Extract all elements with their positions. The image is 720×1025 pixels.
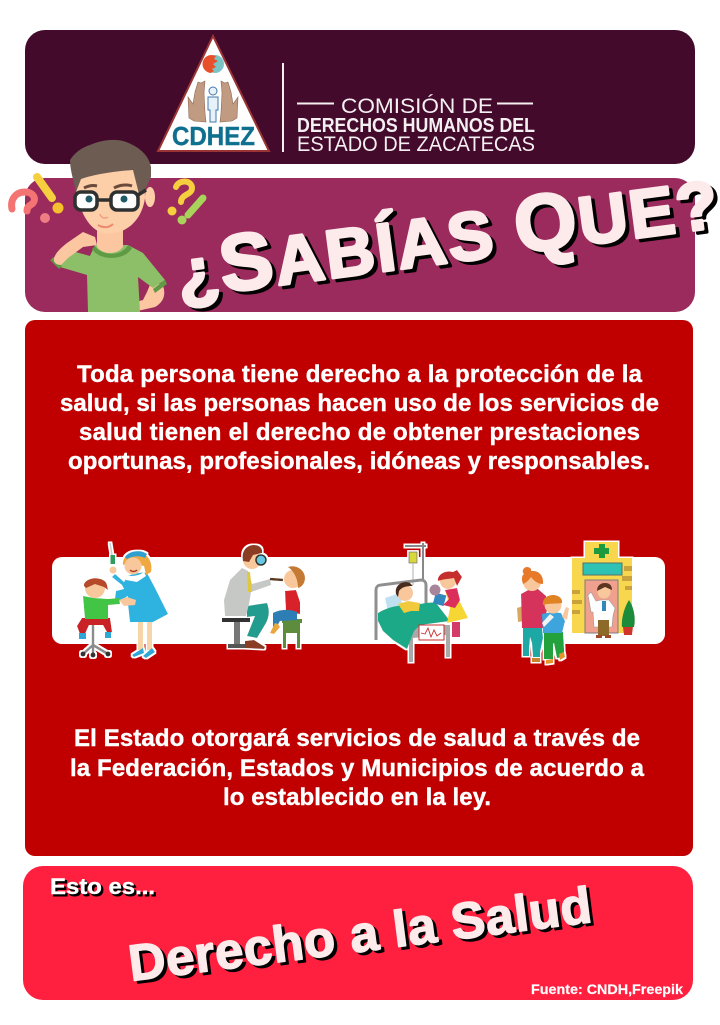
child stool	[282, 619, 302, 648]
eyebrows	[84, 185, 132, 188]
organization name: ESTADO DE ZACATECAS	[297, 133, 535, 156]
icon: doctor examining child	[222, 545, 305, 649]
label: esto es: Esto es...	[52, 876, 157, 901]
neck and collar	[97, 226, 123, 253]
boy	[77, 618, 112, 636]
stool	[222, 618, 250, 622]
label: esto es: Esto es...	[50, 874, 155, 899]
icon: CDHEZ logo: CDHEZ	[172, 123, 255, 151]
text block: state services: la Federación, Estados y Municipios de acuerdo a	[70, 755, 645, 782]
dress	[112, 573, 168, 622]
legs	[247, 603, 269, 638]
text block: state services: El Estado otorgará servicios de salud a través de	[74, 725, 640, 752]
bed frame	[409, 625, 450, 662]
visitor	[452, 622, 460, 637]
coat	[224, 568, 271, 616]
child	[398, 601, 420, 613]
head	[74, 170, 145, 233]
panel: title band	[25, 178, 695, 312]
panel: closing band	[23, 866, 693, 1000]
icon: thinking man	[12, 140, 203, 312]
text block: state services	[70, 725, 645, 811]
title: ¿Sabías que?: ¿SABÍAS QUE?	[175, 158, 720, 318]
panel: header	[25, 30, 695, 164]
boy	[544, 632, 564, 659]
hair	[70, 140, 151, 194]
building	[585, 542, 618, 559]
glasses	[75, 190, 146, 210]
text block: state services: lo establecido en la ley.	[223, 784, 491, 811]
panel: main content	[25, 320, 693, 856]
icon: mother and child at hospital	[517, 542, 635, 664]
organization name: COMISIÓN DE	[341, 95, 493, 118]
child	[285, 590, 300, 614]
illustration strip	[52, 557, 665, 644]
icon: nurse giving injection to child	[77, 543, 168, 658]
text block: right to health: oportunas, profesionales, idóneas y responsables.	[68, 448, 650, 475]
headboard	[376, 580, 426, 640]
chart	[419, 625, 444, 640]
doctor	[588, 592, 615, 627]
source note: Fuente: CNDH,Freepik	[531, 981, 683, 997]
title: derecho a la salud: Derecho a la Salud	[125, 876, 595, 992]
organization name	[297, 95, 535, 156]
text block: right to health: Toda persona tiene derecho a la protección de la	[77, 361, 643, 388]
title: derecho a la salud: Derecho a la Salud	[129, 879, 598, 995]
icon: question and exclamation marks	[12, 177, 203, 224]
icon: CDHEZ logo	[158, 36, 269, 151]
sheet	[378, 602, 450, 649]
text block: right to health	[60, 361, 659, 475]
right forearm	[123, 280, 164, 312]
plant	[622, 600, 635, 627]
text block: right to health: salud, si las personas hacen uso de los servicios de	[60, 390, 659, 417]
divider line	[282, 63, 284, 152]
head	[123, 552, 151, 575]
title: ¿Sabías que?: ¿SABÍAS QUE?	[171, 155, 720, 315]
text block: right to health: salud tienen el derecho de obtener prestaciones	[79, 419, 640, 446]
head	[243, 551, 261, 569]
legs	[138, 620, 152, 650]
mother	[517, 606, 524, 622]
hand on chin	[54, 232, 97, 265]
organization name: DERECHOS HUMANOS DEL	[297, 115, 535, 137]
shirt	[52, 245, 165, 312]
stool	[83, 625, 108, 654]
IV stand	[405, 543, 426, 581]
icon: child in hospital bed with visitor	[376, 543, 468, 662]
